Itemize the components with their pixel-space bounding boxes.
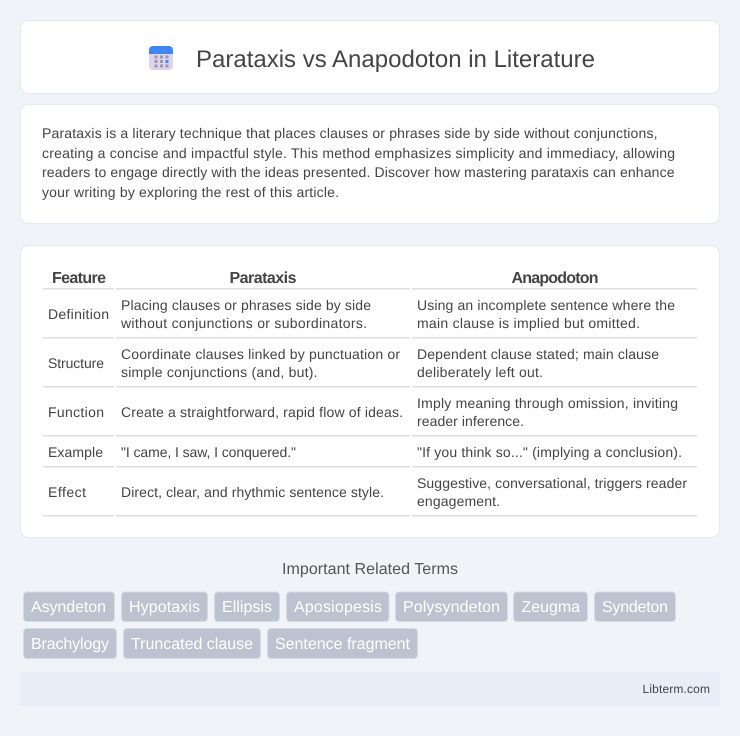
- table row: effect: Effect: [48, 484, 86, 500]
- table row: structure: Coordinate clauses linked by punctuation or: [121, 346, 400, 362]
- table row: function: [48, 395, 678, 429]
- related term tags: [24, 592, 676, 658]
- table row: function: reader inference.: [417, 413, 524, 429]
- text block: introduction paragraph: readers to engage directly with the ideas presented. Discover how mastering parataxis can enhance: [42, 164, 675, 180]
- table row: effect: Direct, clear, and rhythmic sentence style.: [121, 484, 384, 500]
- table row: example: [48, 444, 682, 460]
- table row: effect: engagement.: [417, 493, 500, 509]
- table row: structure: Dependent clause stated; main clause: [417, 346, 659, 362]
- text block: introduction paragraph: creating a concise and impactful style. This method emphasizes simplicity and immediacy, allowing: [42, 145, 675, 161]
- heading: important related terms: Important Related Terms: [282, 561, 458, 578]
- tag: Aposiopesis: Aposiopesis: [294, 599, 382, 616]
- tag: Brachylogy: Brachylogy: [31, 636, 109, 653]
- table row: structure: simple conjunctions (and, but).: [121, 364, 318, 380]
- tag: Sentence fragment: Sentence fragment: [275, 636, 411, 653]
- text block: introduction paragraph: your writing by exploring the rest of this article.: [42, 184, 339, 200]
- table row: definition: [48, 297, 675, 331]
- table row: function: Function: [48, 404, 104, 420]
- tag: Truncated clause: [124, 628, 260, 658]
- table row: structure: deliberately left out.: [417, 364, 543, 380]
- table header: Anapodoton: [512, 270, 598, 287]
- table header: Parataxis: [230, 270, 297, 287]
- table row: example: Example: [48, 444, 103, 460]
- table row: structure: Structure: [48, 355, 104, 371]
- table row: definition: Definition: [48, 306, 109, 322]
- tag: Ellipsis: Ellipsis: [222, 599, 272, 616]
- table row: effect: [48, 475, 687, 509]
- tag: Syndeton: Syndeton: [602, 599, 668, 616]
- tag: Zeugma: [514, 592, 588, 622]
- tag: Brachylogy: [24, 628, 116, 658]
- tag: Hypotaxis: [122, 592, 208, 622]
- table row: definition: Placing clauses or phrases side by side: [121, 297, 371, 313]
- tag: Asyndeton: Asyndeton: [31, 599, 106, 616]
- table row: function: Create a straightforward, rapid flow of ideas.: [121, 404, 403, 420]
- table row: definition: main clause is implied but omitted.: [417, 315, 640, 331]
- icon: calendar: [149, 46, 173, 70]
- tag: Polysyndeton: Polysyndeton: [403, 599, 500, 616]
- table row: definition: Using an incomplete sentence where the: [417, 297, 675, 313]
- text block: introduction paragraph: [42, 125, 675, 200]
- tag: Hypotaxis: Hypotaxis: [129, 599, 200, 616]
- tag: Polysyndeton: [396, 592, 508, 622]
- tag: Ellipsis: [214, 592, 280, 622]
- tag: Truncated clause: Truncated clause: [131, 636, 253, 653]
- footer: [20, 672, 720, 706]
- table row: example: "If you think so..." (implying a conclusion).: [417, 444, 682, 460]
- tag: Sentence fragment: [268, 628, 418, 658]
- header panel: [20, 20, 720, 94]
- table row: definition: without conjunctions or subordinators.: [120, 315, 367, 331]
- tag: Zeugma: Zeugma: [522, 599, 580, 616]
- table header: Feature: [52, 270, 106, 287]
- table row: example: "I came, I saw, I conquered.": [121, 444, 296, 460]
- tag: Syndeton: [594, 592, 676, 622]
- text block: introduction paragraph: Parataxis is a literary technique that places clauses or phrases side by side without conjunctions,: [42, 125, 658, 141]
- footer credit: Libterm.com: [642, 682, 710, 696]
- tag: Asyndeton: [24, 592, 114, 622]
- panel: comparison table: [20, 246, 720, 538]
- tag: Aposiopesis: [286, 592, 389, 622]
- title: Parataxis vs Anapodoton in Literature: [196, 46, 595, 73]
- table header: [52, 270, 598, 287]
- panel: introduction: [20, 104, 720, 224]
- table row: function: Imply meaning through omission, inviting: [417, 395, 678, 411]
- table row: structure: [48, 346, 659, 380]
- table row: effect: Suggestive, conversational, triggers reader: [417, 475, 687, 491]
